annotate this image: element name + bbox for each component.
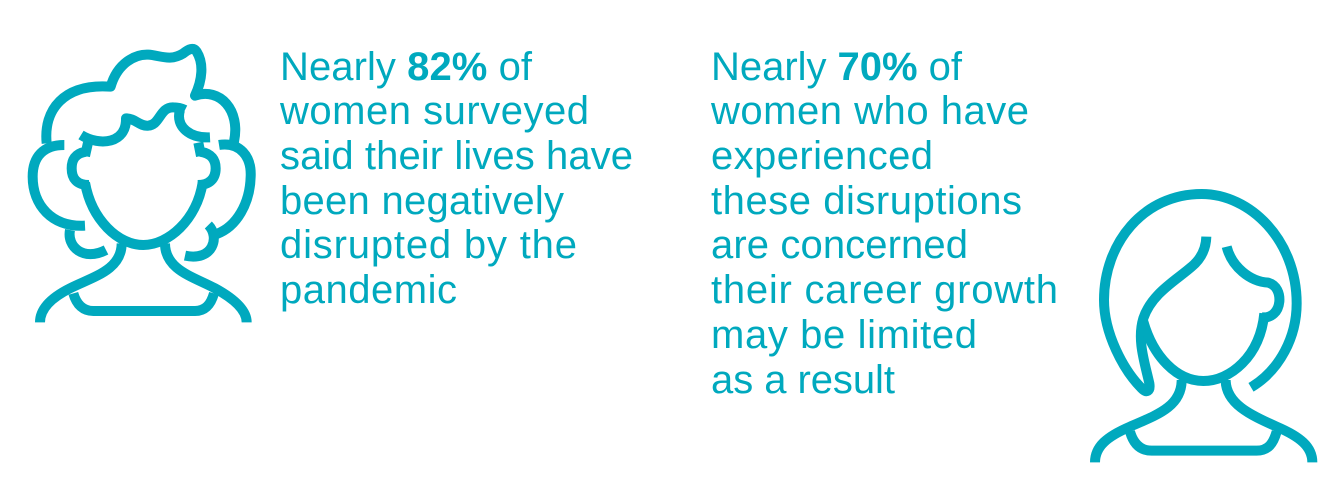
- text block: 70% statistic: may be limited: [711, 313, 977, 357]
- text block: 70% statistic: experienced: [711, 134, 933, 178]
- icon: woman with curly hair: [33, 49, 251, 322]
- icon: woman with bob haircut: [1095, 194, 1312, 462]
- text block: 82% statistic: been negatively: [280, 179, 564, 223]
- text block: 70% statistic: these disruptions: [711, 179, 1022, 223]
- text block: 70% statistic: [710, 45, 1058, 402]
- text block: 82% statistic: Nearly 82% of: [280, 45, 533, 89]
- text block: 70% statistic: women who have: [710, 89, 1029, 133]
- text block: 82% statistic: said their lives have: [280, 134, 633, 178]
- text block: 82% statistic: disrupted by the: [280, 223, 577, 267]
- text block: 70% statistic: are concerned: [711, 223, 968, 267]
- text block: 70% statistic: their career growth: [711, 268, 1058, 312]
- text block: 70% statistic: as a result: [711, 358, 895, 402]
- text block: 82% statistic: women surveyed: [279, 89, 589, 133]
- text block: 82% statistic: [279, 45, 633, 312]
- text block: 82% statistic: pandemic: [280, 268, 457, 312]
- text block: 70% statistic: Nearly 70% of: [711, 45, 963, 89]
